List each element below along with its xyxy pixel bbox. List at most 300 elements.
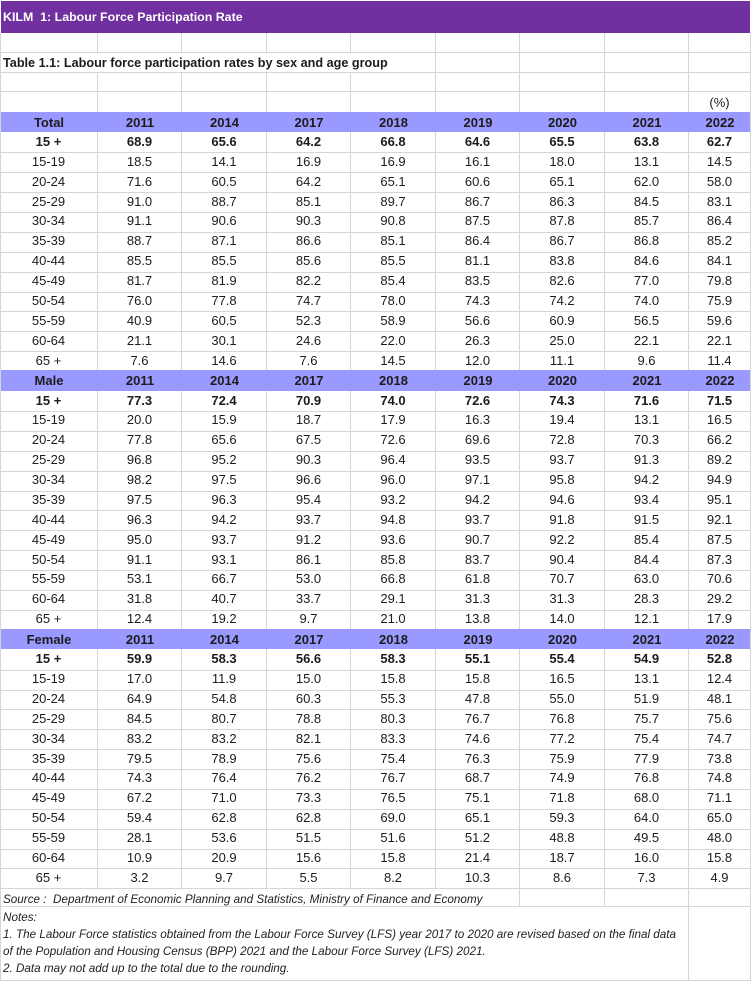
row: total 20-24: 62.0	[634, 174, 659, 189]
row: total 20-24: 20-24	[32, 174, 65, 189]
row: male 50-54: 90.4	[549, 552, 575, 567]
row: female 30-34: 82.1	[296, 731, 321, 746]
row: female 50-54: 65.0	[707, 810, 732, 825]
row: male 50-54: 86.1	[296, 552, 321, 567]
row: female 40-44: 74.3	[127, 770, 152, 785]
row: female 15-19: 12.4	[707, 671, 732, 686]
row: total 65+: 7.6	[130, 353, 149, 368]
row: male 65+: 14.0	[549, 611, 575, 626]
row: male 30-34: 96.0	[380, 472, 406, 487]
row: male 15-19: 15.9	[211, 412, 237, 427]
row: total 20-24: 65.1	[549, 174, 575, 189]
row: female 35-39: 77.9	[634, 751, 659, 766]
row: total 50-54: 75.9	[707, 293, 732, 308]
row: female 15+: 56.6	[296, 651, 321, 666]
header row: male: 2017	[295, 373, 323, 388]
row: total 30-34: 90.8	[380, 213, 406, 228]
row: total 20-24	[1, 173, 750, 193]
row: female 65+	[0, 868, 751, 888]
row: total 30-34: 90.3	[296, 213, 321, 228]
row: male 60-64	[1, 591, 750, 611]
row: male 55-59: 66.8	[380, 571, 406, 586]
row: total 40-44: 40-44	[32, 253, 65, 268]
row: total 45-49: 81.7	[127, 273, 152, 288]
row: total 15-19: 16.9	[380, 154, 406, 169]
row: total 25-29: 86.7	[465, 194, 490, 209]
row: total 55-59: 60.9	[549, 313, 575, 328]
row: female 15-19: 15-19	[32, 671, 65, 686]
row: total 55-59: 55-59	[32, 313, 65, 328]
row: total 40-44	[1, 253, 750, 273]
row: total 15+: 64.6	[465, 134, 490, 149]
header row: total: 2011	[126, 115, 154, 130]
row: total 35-39: 88.7	[127, 233, 152, 248]
row: total 60-64: 21.1	[127, 333, 152, 348]
row: total 20-24: 60.5	[211, 174, 237, 189]
source row	[0, 888, 751, 907]
row: male 45-49: 93.6	[380, 532, 406, 547]
row: total 30-34: 90.6	[211, 213, 237, 228]
row: female 65+: 5.5	[299, 870, 318, 885]
row: total 45-49: 77.0	[634, 273, 659, 288]
row: total 60-64: 26.3	[465, 333, 490, 348]
row: female 35-39: 35-39	[32, 751, 65, 766]
row: male 30-34: 94.9	[707, 472, 732, 487]
row: male 15-19: 16.3	[465, 412, 490, 427]
row: female 45-49	[1, 790, 750, 810]
row: male 25-29: 96.8	[127, 452, 152, 467]
row: total 60-64: 22.1	[707, 333, 732, 348]
row: female 25-29	[1, 710, 750, 730]
header row: female: 2017	[295, 632, 323, 647]
row: total 15+: 15 +	[36, 134, 61, 149]
row: male 50-54: 83.7	[465, 552, 490, 567]
row: female 15-19: 15.8	[380, 671, 406, 686]
row: male 55-59: 63.0	[634, 571, 659, 586]
row: female 30-34: 74.6	[465, 731, 490, 746]
row: female 25-29: 78.8	[296, 711, 321, 726]
row: total 30-34: 87.5	[465, 213, 490, 228]
row: male 45-49: 85.4	[634, 532, 659, 547]
row: male 45-49: 93.7	[211, 532, 237, 547]
row: female 65+: 9.7	[215, 870, 233, 885]
row: female 55-59: 49.5	[634, 830, 659, 845]
row: total 40-44: 84.6	[634, 253, 659, 268]
header row: female: 2022	[706, 632, 734, 647]
row: female 55-59: 55-59	[32, 830, 65, 845]
row: female 35-39: 75.4	[380, 751, 406, 766]
row: female 50-54: 50-54	[32, 810, 65, 825]
row: total 25-29: 88.7	[211, 194, 237, 209]
row: female 20-24: 64.9	[127, 691, 152, 706]
row: female 20-24: 55.3	[380, 691, 406, 706]
row: male 60-64: 40.7	[211, 591, 237, 606]
row: male 55-59	[1, 571, 750, 591]
row: female 50-54: 59.3	[549, 810, 575, 825]
panel: total	[1, 112, 750, 370]
row: male 45-49: 87.5	[707, 532, 732, 547]
row: total 15+: 65.6	[211, 134, 237, 149]
row: total 45-49: 82.6	[549, 273, 575, 288]
row: male 20-24: 70.3	[634, 432, 659, 447]
row: female 50-54: 69.0	[380, 810, 406, 825]
row: female 15+: 58.3	[380, 651, 406, 666]
row: total 20-24: 71.6	[127, 174, 152, 189]
row: total 60-64: 25.0	[549, 333, 575, 348]
notes panel	[0, 907, 751, 981]
row: female 60-64	[0, 848, 751, 868]
row: male 60-64: 29.2	[707, 591, 732, 606]
header row: male: 2021	[633, 373, 661, 388]
row: total 35-39: 86.4	[465, 233, 490, 248]
row: total 15+	[1, 132, 750, 153]
row: female 20-24: 54.8	[211, 691, 237, 706]
row: total 55-59: 40.9	[127, 313, 152, 328]
row: female 55-59: 48.0	[707, 830, 732, 845]
row: female 15+: 55.1	[465, 651, 490, 666]
row: male 20-24: 20-24	[32, 432, 65, 447]
row: female 60-64: 15.6	[296, 850, 321, 865]
row: male 30-34: 96.6	[296, 472, 321, 487]
row: female 45-49: 71.8	[549, 790, 575, 805]
header row: total	[0, 112, 751, 132]
row: female 55-59	[1, 830, 750, 850]
header row: total: Total	[34, 115, 64, 130]
row: male 35-39: 93.2	[380, 492, 406, 507]
row: total 15-19: 18.0	[549, 154, 575, 169]
row: total 65+: 14.6	[211, 353, 237, 368]
row: male 20-24: 67.5	[296, 432, 321, 447]
row: male 20-24: 72.6	[380, 432, 406, 447]
row: total 50-54: 76.0	[127, 293, 152, 308]
row: total 65+: 11.4	[707, 353, 732, 368]
header row: female: Female	[27, 632, 71, 647]
header row: male: 2014	[210, 373, 239, 388]
row: female 15+	[1, 649, 750, 671]
header row: total: 2020	[548, 115, 577, 130]
blank spreadsheet row	[1, 33, 750, 53]
row: total 55-59: 52.3	[296, 313, 321, 328]
row: female 60-64: 21.4	[465, 850, 490, 865]
row: male 65+: 12.1	[634, 611, 659, 626]
row: male 25-29: 93.5	[465, 452, 490, 467]
row: male 60-64: 60-64	[32, 591, 65, 606]
row: total 50-54: 74.3	[465, 293, 490, 308]
row: female 40-44: 74.8	[707, 770, 732, 785]
row: female 35-39: 75.6	[296, 751, 321, 766]
title bar	[1, 1, 750, 33]
row: male 15+: 74.0	[380, 393, 406, 408]
row: male 65+: 19.2	[211, 611, 237, 626]
row: total 65+: 11.1	[550, 353, 574, 368]
row: total 35-39: 87.1	[211, 233, 237, 248]
row: female 40-44	[1, 770, 750, 790]
row: male 65+: 13.8	[465, 611, 490, 626]
row: male 25-29: 90.3	[296, 452, 321, 467]
row: female 40-44: 76.4	[211, 770, 237, 785]
row: total 15-19: 14.1	[211, 154, 237, 169]
row: male 15-19: 15-19	[32, 412, 65, 427]
row: female 40-44: 74.9	[549, 770, 575, 785]
row: male 55-59: 70.6	[707, 571, 732, 586]
row: total 50-54: 78.0	[380, 293, 406, 308]
header row: male: 2011	[126, 373, 154, 388]
row: female 25-29: 80.3	[380, 711, 406, 726]
row: male 30-34: 97.5	[211, 472, 237, 487]
row: total 40-44: 85.6	[296, 253, 321, 268]
row: total 50-54: 74.0	[634, 293, 659, 308]
row: male 65+: 21.0	[380, 611, 406, 626]
row: female 15-19: 17.0	[127, 671, 152, 686]
row: male 25-29: 93.7	[549, 452, 575, 467]
row: female 35-39: 73.8	[707, 751, 732, 766]
row: total 15-19: 15-19	[32, 154, 65, 169]
row: male 25-29: 25-29	[32, 452, 65, 467]
row: total 20-24: 64.2	[296, 174, 321, 189]
row: male 60-64: 29.1	[380, 591, 406, 606]
header row: female: 2020	[548, 632, 577, 647]
row: female 40-44: 76.2	[296, 770, 321, 785]
row: female 40-44: 76.7	[380, 770, 406, 785]
row: female 15-19	[1, 671, 750, 691]
panel: female	[1, 629, 750, 889]
row: female 25-29: 75.6	[707, 711, 732, 726]
row: male 50-54	[1, 551, 750, 571]
row: female 55-59: 51.5	[296, 830, 321, 845]
row: female 40-44: 68.7	[465, 770, 490, 785]
header row: male	[0, 370, 751, 391]
row: total 25-29: 86.3	[549, 194, 575, 209]
row: male 45-49: 90.7	[465, 532, 490, 547]
row: female 15-19: 13.1	[634, 671, 659, 686]
row: male 35-39: 94.6	[549, 492, 575, 507]
row: total 60-64: 30.1	[211, 333, 237, 348]
row: male 15-19: 19.4	[549, 412, 575, 427]
row: female 30-34: 77.2	[549, 731, 575, 746]
row: total 15+: 68.9	[127, 134, 152, 149]
row: total 65+: 9.6	[637, 353, 656, 368]
row: total 40-44: 83.8	[549, 253, 575, 268]
row: male 50-54: 50-54	[32, 552, 65, 567]
row: male 50-54: 87.3	[707, 552, 732, 567]
row: male 60-64: 28.3	[634, 591, 659, 606]
row: male 55-59: 55-59	[32, 571, 65, 586]
row: male 60-64: 31.8	[127, 591, 152, 606]
row: female 50-54: 59.4	[127, 810, 152, 825]
row: female 60-64: 15.8	[380, 850, 406, 865]
row: female 20-24: 48.1	[707, 691, 732, 706]
row: male 60-64: 33.7	[296, 591, 321, 606]
row: total 50-54: 74.2	[549, 293, 575, 308]
row: male 15+: 71.5	[707, 393, 732, 408]
unit label row: (%)	[709, 95, 730, 110]
row: total 35-39: 85.1	[380, 233, 406, 248]
row: total 35-39	[1, 233, 750, 253]
row: female 15+: 55.4	[549, 651, 575, 666]
row: total 60-64	[1, 332, 750, 352]
row: total 35-39: 85.2	[707, 233, 732, 248]
row: total 60-64: 24.6	[296, 333, 321, 348]
row: male 60-64: 31.3	[465, 591, 490, 606]
row: total 50-54: 74.7	[296, 293, 321, 308]
row: total 55-59: 60.5	[211, 313, 237, 328]
row: male 30-34: 98.2	[127, 472, 152, 487]
row: female 35-39	[1, 750, 750, 770]
row: male 15+: 15 +	[36, 393, 61, 408]
header row: female: 2018	[379, 632, 408, 647]
row: male 50-54: 84.4	[634, 552, 659, 567]
row: total 45-49: 81.9	[211, 273, 237, 288]
row: total 40-44: 84.1	[707, 253, 732, 268]
row: female 60-64: 18.7	[549, 850, 575, 865]
row: male 15+: 70.9	[296, 393, 321, 408]
row: male 30-34: 95.8	[549, 472, 575, 487]
row: male 40-44: 91.5	[634, 512, 659, 527]
row: male 20-24	[1, 432, 750, 452]
row: male 45-49: 91.2	[296, 532, 321, 547]
row: female 50-54: 64.0	[634, 810, 659, 825]
row: female 25-29: 84.5	[127, 711, 152, 726]
row: total 25-29: 89.7	[380, 194, 406, 209]
row: male 35-39: 96.3	[211, 492, 237, 507]
row: total 45-49: 79.8	[707, 273, 732, 288]
row: total 15-19: 16.1	[465, 154, 490, 169]
row: male 35-39: 94.2	[465, 492, 490, 507]
row: total 15+: 63.8	[634, 134, 659, 149]
row: male 25-29: 91.3	[634, 452, 659, 467]
row: total 35-39: 86.7	[549, 233, 575, 248]
row: total 20-24: 60.6	[465, 174, 490, 189]
row: female 35-39: 76.3	[465, 751, 490, 766]
row: female 15+: 54.9	[634, 651, 659, 666]
row: total 15-19: 18.5	[127, 154, 152, 169]
row: total 15-19: 14.5	[707, 154, 732, 169]
row: female 15-19: 15.0	[296, 671, 321, 686]
row: male 25-29	[1, 452, 750, 472]
row: female 65+: 7.3	[637, 870, 656, 885]
header row: male: 2022	[706, 373, 734, 388]
row: total 50-54	[1, 293, 750, 312]
row: total 15+: 62.7	[707, 134, 732, 149]
row: female 50-54: 62.8	[211, 810, 237, 825]
source text: Source : Department of Economic Planning and Statistics, Ministry of Finance and Economy	[3, 893, 482, 906]
row: female 20-24	[1, 691, 750, 710]
row: male 50-54: 91.1	[127, 552, 152, 567]
row: female 55-59: 48.8	[549, 830, 575, 845]
header row: female: 2014	[210, 632, 239, 647]
row: female 35-39: 78.9	[211, 751, 237, 766]
row: male 15-19	[1, 412, 750, 432]
table heading row	[0, 53, 751, 73]
row: male 35-39: 93.4	[634, 492, 659, 507]
row: total 25-29: 85.1	[296, 194, 321, 209]
row: male 20-24: 72.8	[549, 432, 575, 447]
row: male 15+: 77.3	[127, 393, 152, 408]
row: female 55-59: 51.2	[465, 830, 490, 845]
row: female 20-24: 60.3	[296, 691, 321, 706]
row: female 15+: 58.3	[211, 651, 237, 666]
row: total 50-54: 50-54	[32, 293, 65, 308]
row: female 25-29: 80.7	[211, 711, 237, 726]
panel: male	[1, 370, 750, 629]
row: total 30-34: 85.7	[634, 213, 659, 228]
row: total 15+: 64.2	[296, 134, 321, 149]
row: total 25-29: 83.1	[707, 194, 732, 209]
row: female 40-44: 76.8	[634, 770, 659, 785]
row: male 55-59: 53.1	[127, 571, 152, 586]
row: male 65+: 12.4	[127, 611, 152, 626]
row: total 65+: 65 +	[36, 353, 61, 368]
blank spreadsheet row	[1, 73, 750, 92]
row: total 20-24: 65.1	[380, 174, 406, 189]
row: female 45-49: 71.0	[211, 790, 237, 805]
row: male 50-54: 85.8	[380, 552, 406, 567]
notes text: Notes: 1. The Labour Force statistics obtained from the Labour Force Survey (LFS) year 2017 to 2020 are revised based on the final data of the Population and Housing Census (BPP) 2021 and the Labour Force Survey (LFS) 2021. 2. Data may not add up to the total due to the rounding.	[3, 911, 676, 975]
row: total 35-39: 35-39	[32, 233, 65, 248]
header row: male: 2020	[548, 373, 577, 388]
row: total 55-59: 56.6	[465, 313, 490, 328]
row: female 55-59: 28.1	[127, 830, 152, 845]
title bar: KILM 1: Labour Force Participation Rate	[3, 10, 243, 24]
row: male 15+: 74.3	[549, 393, 575, 408]
row: female 65+: 10.3	[465, 870, 490, 885]
row: female 45-49: 71.1	[707, 790, 732, 805]
row: total 65+: 12.0	[465, 353, 490, 368]
row: male 30-34: 97.1	[465, 472, 490, 487]
row: total 35-39: 86.6	[296, 233, 321, 248]
row: total 15+: 65.5	[549, 134, 575, 149]
row: male 25-29: 89.2	[707, 452, 732, 467]
unit label row	[97, 92, 730, 112]
row: female 25-29: 25-29	[32, 711, 65, 726]
row: total 60-64: 60-64	[32, 333, 65, 348]
row: male 40-44: 92.1	[707, 512, 732, 527]
row: total 55-59: 56.5	[634, 313, 659, 328]
row: male 55-59: 53.0	[296, 571, 321, 586]
row: female 60-64: 20.9	[211, 850, 237, 865]
row: male 55-59: 61.8	[465, 571, 490, 586]
row: female 15+: 52.8	[707, 651, 732, 666]
table heading row: Table 1.1: Labour force participation rates by sex and age group	[3, 56, 388, 70]
row: male 45-49: 92.2	[549, 532, 575, 547]
row: female 15+: 15 +	[36, 651, 61, 666]
row: male 40-44: 93.7	[296, 512, 321, 527]
row: female 65+: 8.2	[384, 870, 402, 885]
row: male 40-44: 91.8	[549, 512, 575, 527]
row: total 50-54: 77.8	[211, 293, 237, 308]
row: female 50-54: 62.8	[296, 810, 321, 825]
row: male 40-44: 96.3	[127, 512, 152, 527]
row: total 25-29: 84.5	[634, 194, 659, 209]
row: male 35-39	[1, 492, 750, 511]
row: female 65+: 4.9	[710, 870, 729, 885]
row: male 40-44: 94.2	[211, 512, 237, 527]
row: female 60-64: 15.8	[707, 850, 732, 865]
row: male 40-44: 93.7	[465, 512, 490, 527]
row: male 60-64: 31.3	[549, 591, 575, 606]
row: female 60-64: 10.9	[127, 850, 152, 865]
row: total 30-34: 87.8	[549, 213, 575, 228]
row: male 40-44: 40-44	[32, 512, 65, 527]
row: male 35-39: 95.4	[296, 492, 321, 507]
row: total 25-29	[1, 193, 750, 213]
row: male 55-59: 70.7	[549, 571, 575, 586]
row: female 15-19: 15.8	[465, 671, 490, 686]
row: female 20-24: 47.8	[465, 691, 490, 706]
row: total 30-34: 30-34	[32, 213, 65, 228]
row: female 30-34: 83.2	[127, 731, 152, 746]
row: total 25-29: 91.0	[127, 194, 152, 209]
